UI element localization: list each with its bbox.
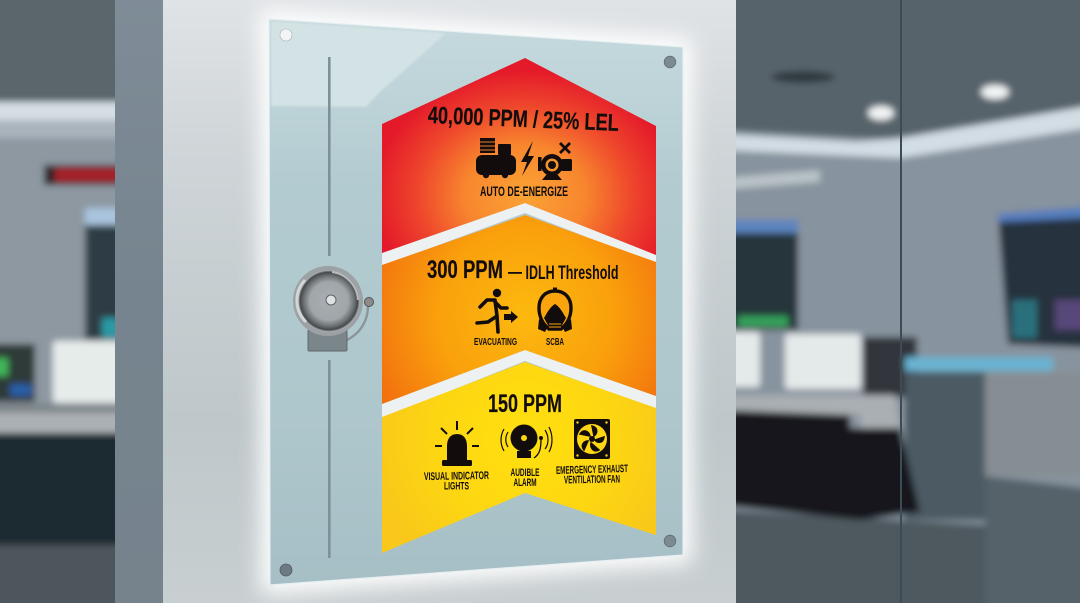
icon: ventilation fan [574, 419, 610, 459]
glass vertical slot top [328, 57, 331, 256]
panel: glass sign board [269, 19, 683, 585]
label: alarm: ALARM [514, 477, 536, 489]
screw bottom left [280, 564, 292, 576]
panel: yellow tier 150 PPM [382, 362, 656, 553]
screw top right [664, 56, 676, 68]
label: evacuating: EVACUATING [474, 336, 517, 348]
icon: SCBA mask [538, 288, 572, 332]
icon: cross mark [560, 143, 570, 153]
heading: 300 PPM: 300 PPM [427, 256, 503, 284]
label: lights: LIGHTS [444, 480, 469, 492]
label: ventilation fan: VENTILATION FAN [564, 474, 620, 486]
glass partition line [900, 0, 902, 603]
icon: air compressor [476, 138, 516, 178]
icon: evacuating runner with arrow [477, 289, 518, 332]
heading: 150 PPM: 150 PPM [488, 390, 562, 418]
heading: 40,000 PPM / 25% LEL: 40,000 PPM / 25% LEL [427, 102, 619, 137]
background: blurred left control room [0, 0, 140, 603]
wall column [115, 0, 736, 603]
label: audible alarm: AUDIBLE [510, 467, 540, 479]
icon: visual indicator beacon [435, 421, 479, 466]
icon: mechanical bell [293, 266, 374, 351]
icon: motor pump [538, 154, 572, 180]
glass vertical slot bottom [328, 360, 331, 558]
heading: IDLH Threshold: IDLH Threshold [526, 263, 618, 284]
white chevron backing bands [382, 203, 656, 418]
panel: orange tier 300 PPM [382, 215, 656, 404]
icon: audible alarm bell [501, 424, 552, 458]
label: visual indicator lights: VISUAL INDICATOR [424, 470, 489, 483]
label: auto de-energize: AUTO DE-ENERGIZE [480, 183, 568, 199]
screw top left [280, 29, 292, 41]
icon: lightning bolt [521, 141, 534, 176]
dash [508, 272, 522, 274]
panel: red tier 40,000 PPM [382, 58, 656, 255]
background: blurred right control room [720, 0, 1080, 603]
screw bottom right [664, 535, 676, 547]
glass reflection [271, 21, 446, 107]
label: SCBA: SCBA [546, 336, 564, 348]
label: emergency exhaust: EMERGENCY EXHAUST [556, 463, 628, 477]
